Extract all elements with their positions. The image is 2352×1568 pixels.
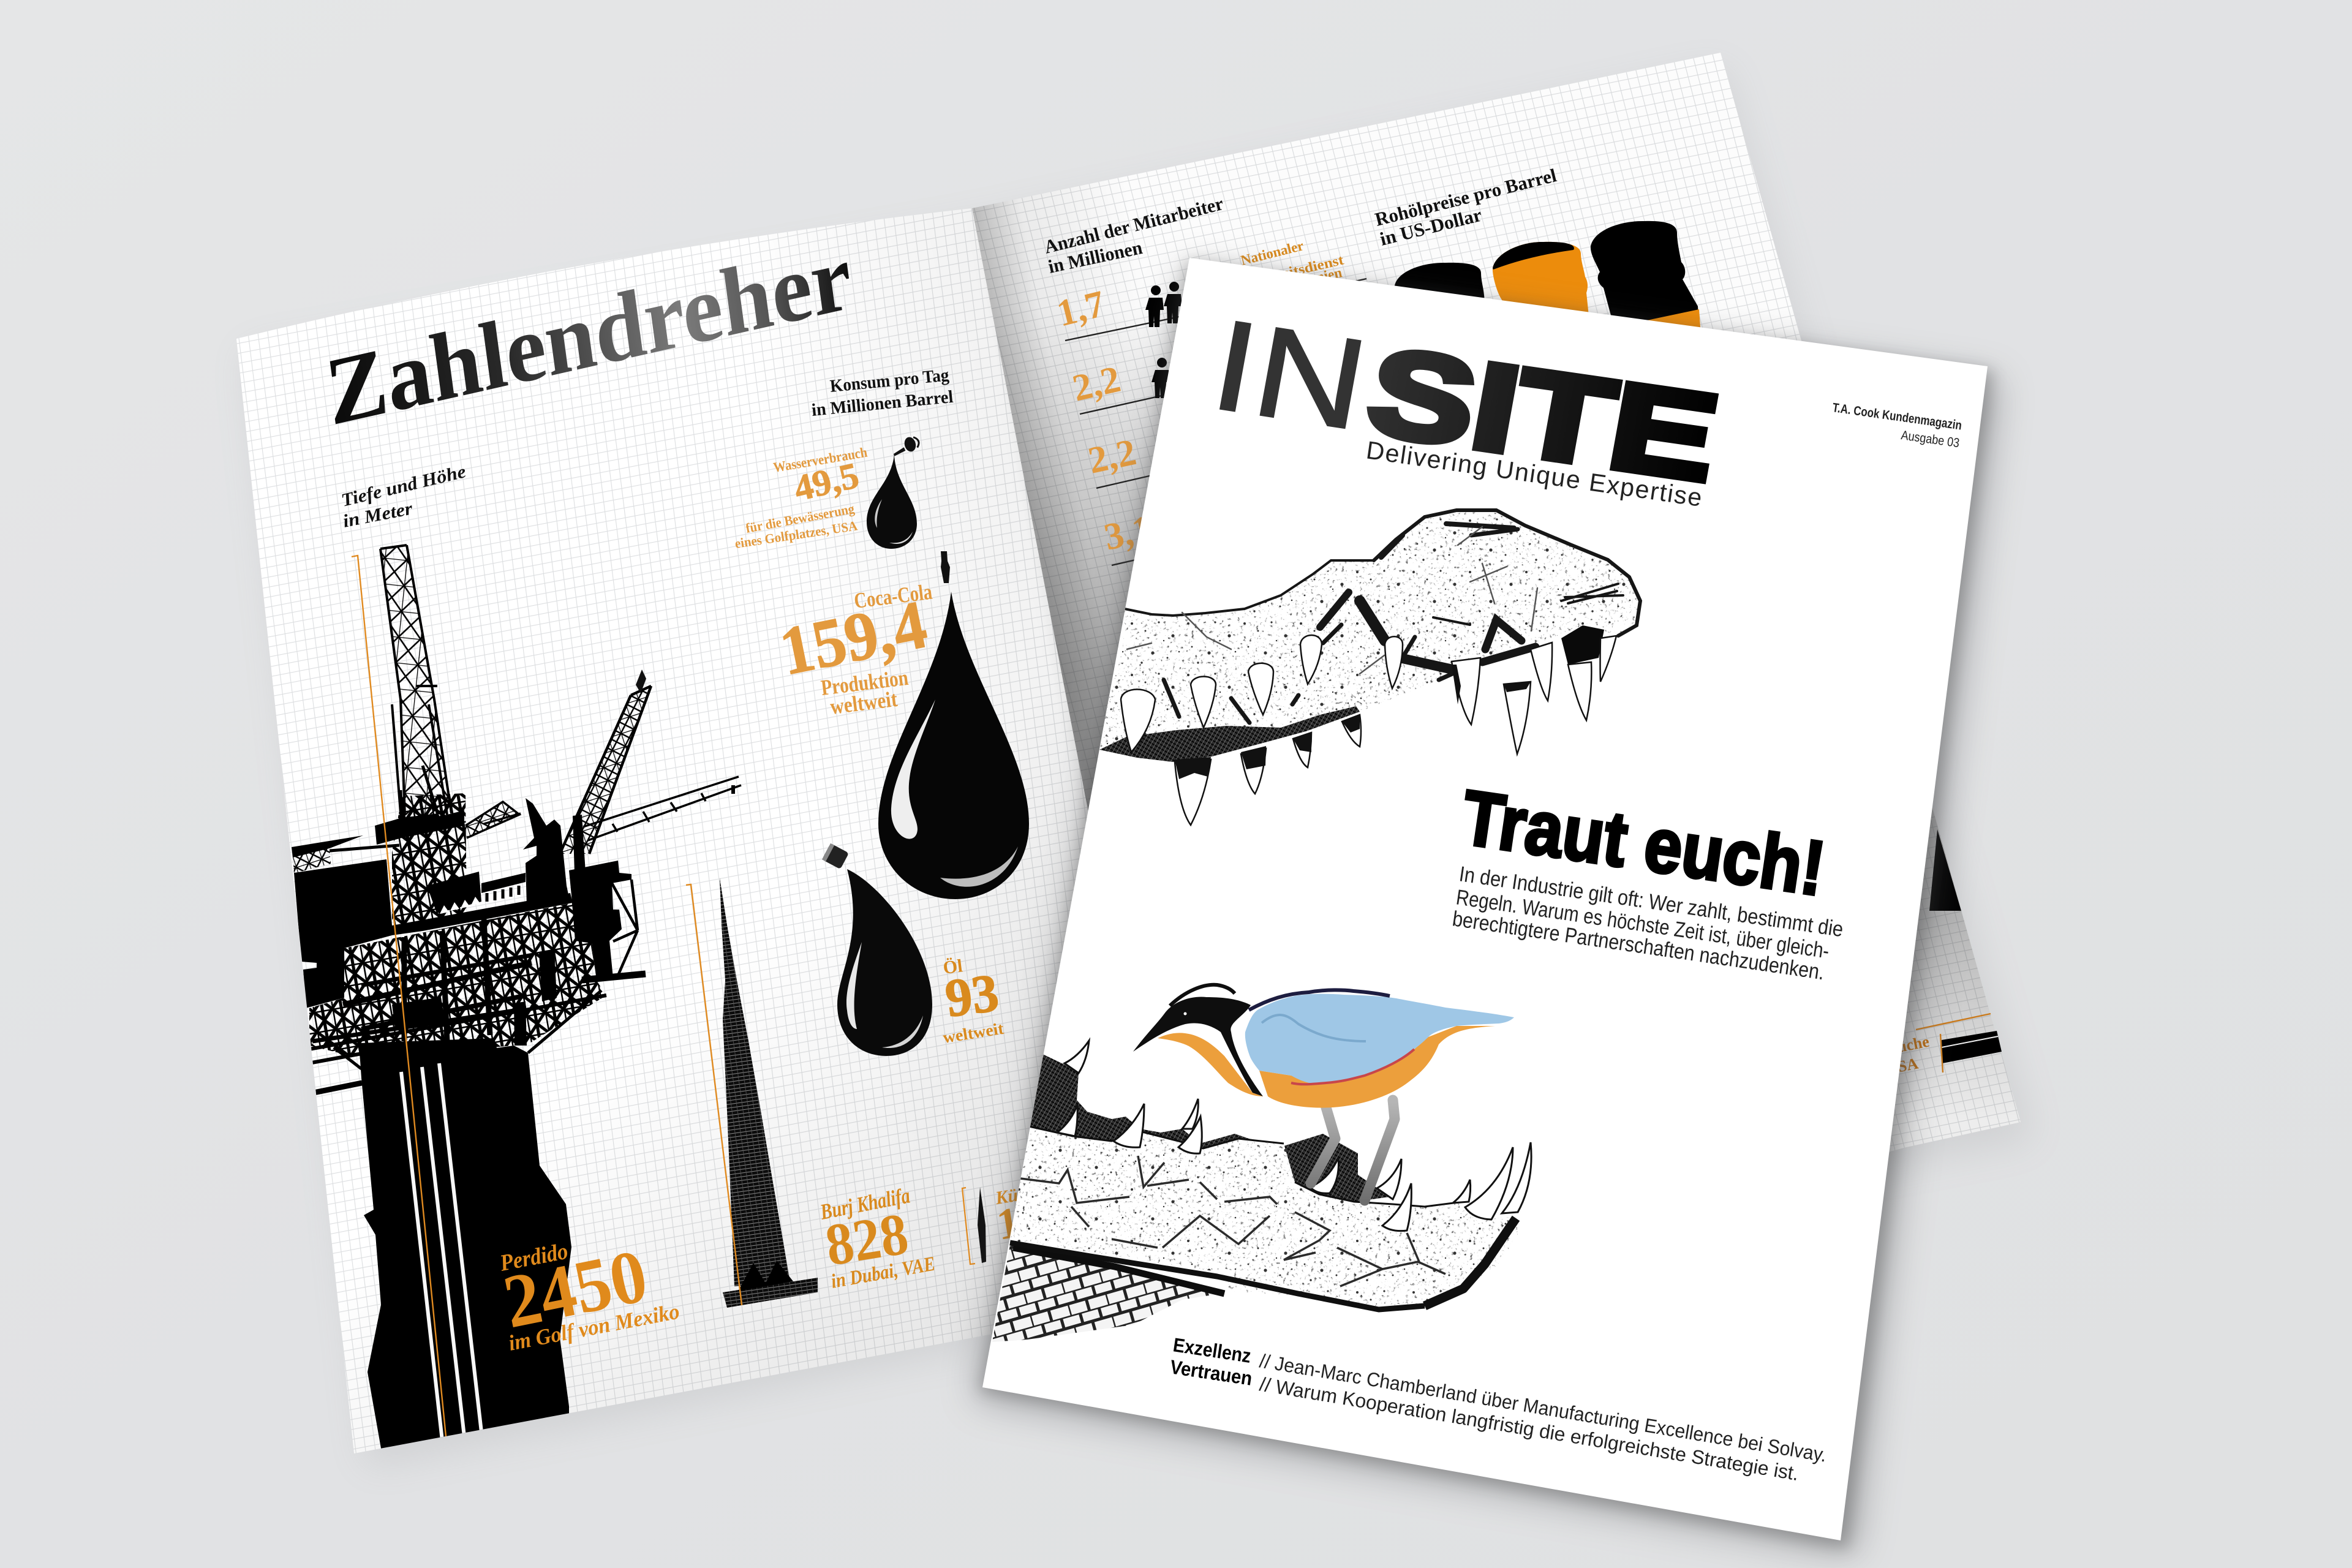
logo: INSITE: SITE [1359,323,1727,507]
chart heading: daily consumption [811,365,954,420]
Burj label: Burj Khalifa [818,1183,912,1224]
hull white stripes [401,1063,481,1441]
chart heading: depth and height: in Meter [341,498,415,532]
upper deck band [392,893,573,935]
teaser lines: Exzellenz [1172,1333,1253,1367]
catwalk with railings [481,873,526,902]
logo: INSITE: IN [1202,292,1378,457]
hatch behind bird legs [1284,1134,1390,1202]
cover shadow [974,266,2000,1556]
teaser lines: // Jean-Marc Chamberland über Manufacturing Excellence bei Solvay. [1258,1349,1828,1466]
tank row [427,872,481,914]
upper jaw texture [1099,510,1640,762]
bird wing [1245,994,1514,1083]
masthead note: T.A. Cook Kundenmagazin [1831,401,1962,433]
chart: employee numbers: 2,2 [1069,358,1125,410]
bird legs [1311,1100,1395,1200]
headline: Traut euch! [1457,774,1830,912]
bird eye [1183,1012,1187,1016]
upper jaw [992,510,1640,1342]
oil label: 93 [942,963,1002,1029]
intro paragraph [1451,862,1845,984]
intro paragraph: In der Industrie gilt oft: Wer zahlt, bestimmt die [1458,862,1845,941]
crane cab [523,798,570,907]
bottom-right chart fragment: Küche [1884,1033,1931,1058]
lower jaw rear hatch [1029,1054,1284,1155]
bird red line [1291,1049,1414,1084]
cover edge shadow [979,260,1994,1550]
lower jaw teeth [1057,1041,1531,1231]
bottom-right chart fragment [1884,829,2002,1078]
lower jaw crack lines [1020,1156,1446,1286]
redwood label: Küstenmammutbaum [993,1163,1159,1208]
crane boom secondary [583,777,741,840]
lower jaw [1010,1126,1518,1310]
drop: water [867,454,917,549]
Burj label [818,1183,937,1293]
crane mast [573,815,586,873]
chart heading: depth and height: Tiefe und Höhe [339,461,468,511]
oil label: weltweit [941,1019,1005,1047]
oil label [941,956,1005,1047]
chart heading: crude prices: Rohölpreise pro Barrel [1373,164,1559,230]
water label: für die Bewässerung [744,501,856,536]
orange employer label [1223,238,1345,300]
chart: employee numbers: 2,2 [1085,431,1140,482]
bird wing shading [1262,1015,1366,1041]
chart: barrel one [1395,263,1494,404]
water label: Wasserverbrauch [772,445,869,475]
small deck crane [466,802,521,838]
icon: person [1152,358,1170,398]
main black module [294,859,392,1008]
masthead note [1831,401,1962,450]
chart: barrel three [1591,221,1704,392]
left wing lattice [292,835,399,873]
height scale: Burj Khalifa [686,884,742,1305]
drop: cola [878,592,1029,899]
masthead note: Ausgabe 03 [1900,428,1961,450]
bird back edge [1249,990,1390,1010]
upper jaw pores [1099,510,1640,762]
tagline: Delivering Unique Expertise [1365,435,1704,512]
shadow under open magazine [245,67,2034,1467]
upper jaw outline and shading [1125,510,1640,723]
top deck block [375,810,464,845]
chart: employee numbers: 1,7 [1053,283,1109,335]
redwood label [993,1163,1159,1250]
chart heading: employees: in Millionen [1046,236,1144,277]
panel: magazine cover [982,258,1988,1540]
height scale: redwood [962,1188,975,1264]
icon: cola bottle [941,551,950,583]
tooth roots [1175,665,1531,779]
cola label: Produktion [820,665,910,700]
illustration: Burj Khalifa [720,878,818,1308]
bird breast [1158,1033,1263,1096]
bird belly [1259,1026,1495,1108]
icon: oil barrel [822,843,849,869]
chart heading: depth and height [339,461,468,532]
Perdido label: 2450 [497,1234,654,1344]
upper jaw nostril shadow [1561,625,1604,665]
row rules [1065,279,1366,565]
lower jaw dark edge [1010,1126,1516,1310]
deck beams and struts [309,880,646,1093]
mid lattice bars [312,919,532,1041]
bird head [1133,997,1263,1096]
cola label: Coca-Cola [853,579,933,613]
upper jaw teeth [1121,635,1616,825]
title: Zahlendreher [320,222,858,446]
height scale: Perdido [352,556,446,1436]
chart heading: daily consumption: Konsum pro Tag [829,365,950,396]
illustration: coast redwood [978,1187,986,1263]
chart: barrel two [1493,242,1596,392]
orange employer label: Gesundheitsdienst [1223,252,1345,295]
illustration: bird [1133,985,1514,1200]
right black module [569,861,631,981]
Perdido label: Perdido [497,1238,570,1276]
redwood label: 115 [993,1191,1064,1250]
bottom-right chart fragment: USA [1885,1054,1920,1078]
teaser lines [1169,1333,1828,1485]
water label [734,445,869,551]
derrick legs to deck [401,766,438,821]
Burj label: 828 [821,1200,913,1278]
illustration: crocodile jaws [992,510,1845,1485]
water label: eines Golfplatzes, USA [734,518,859,551]
bird crown line [1170,985,1235,1006]
water label: 49,5 [790,455,862,509]
lower jaw pores [1010,1126,1516,1306]
logo: INSITE [1202,292,1727,507]
intro paragraph: Regeln. Warum es höchste Zeit ist, über gleich- [1455,885,1831,963]
illustration: Perdido oil platform [292,545,741,1452]
orange employer label: Nationaler [1239,238,1305,268]
teaser lines: Vertrauen [1169,1355,1254,1390]
panel: right inside page [972,53,2021,1348]
teaser lines: // Warum Kooperation langfristig die erfolgreichste Strategie ist. [1258,1373,1801,1485]
mid lattice [309,903,606,1058]
crane boom main [560,669,651,854]
orange employer label: Großbritannien [1247,265,1343,300]
derrick tower [380,545,451,821]
neck scales [992,1245,1221,1342]
icon: watering can [891,435,921,456]
icon: business people [1145,282,1182,327]
lower jaw texture [1010,1126,1518,1310]
Perdido label: im Golf von Mexiko [507,1299,681,1355]
panel: left inside page [236,208,1182,1453]
chart: employee numbers: 3,1 [1101,508,1156,559]
chart heading: crude prices: in US-Dollar [1378,204,1484,250]
central columns [392,949,557,1046]
chart heading: daily consumption: in Millionen Barrel [811,387,954,420]
oil label: Öl [942,956,963,978]
chart heading: employees: Anzahl der Mitarbeiter [1042,192,1226,258]
Burj label: in Dubai, VAE [829,1253,937,1293]
neck dark fold [1013,1248,1224,1294]
chart: employee numbers [1053,283,1156,559]
hull columns [359,1038,571,1452]
intro paragraph: berechtigtere Partnerschaften nachzudenken. [1451,907,1826,984]
upper jaw dark underside [1099,706,1360,762]
drop: oil [837,869,932,1056]
cola label: 159,4 [774,586,933,690]
upper lattice [392,793,467,934]
cola label: weltweit [829,687,899,719]
